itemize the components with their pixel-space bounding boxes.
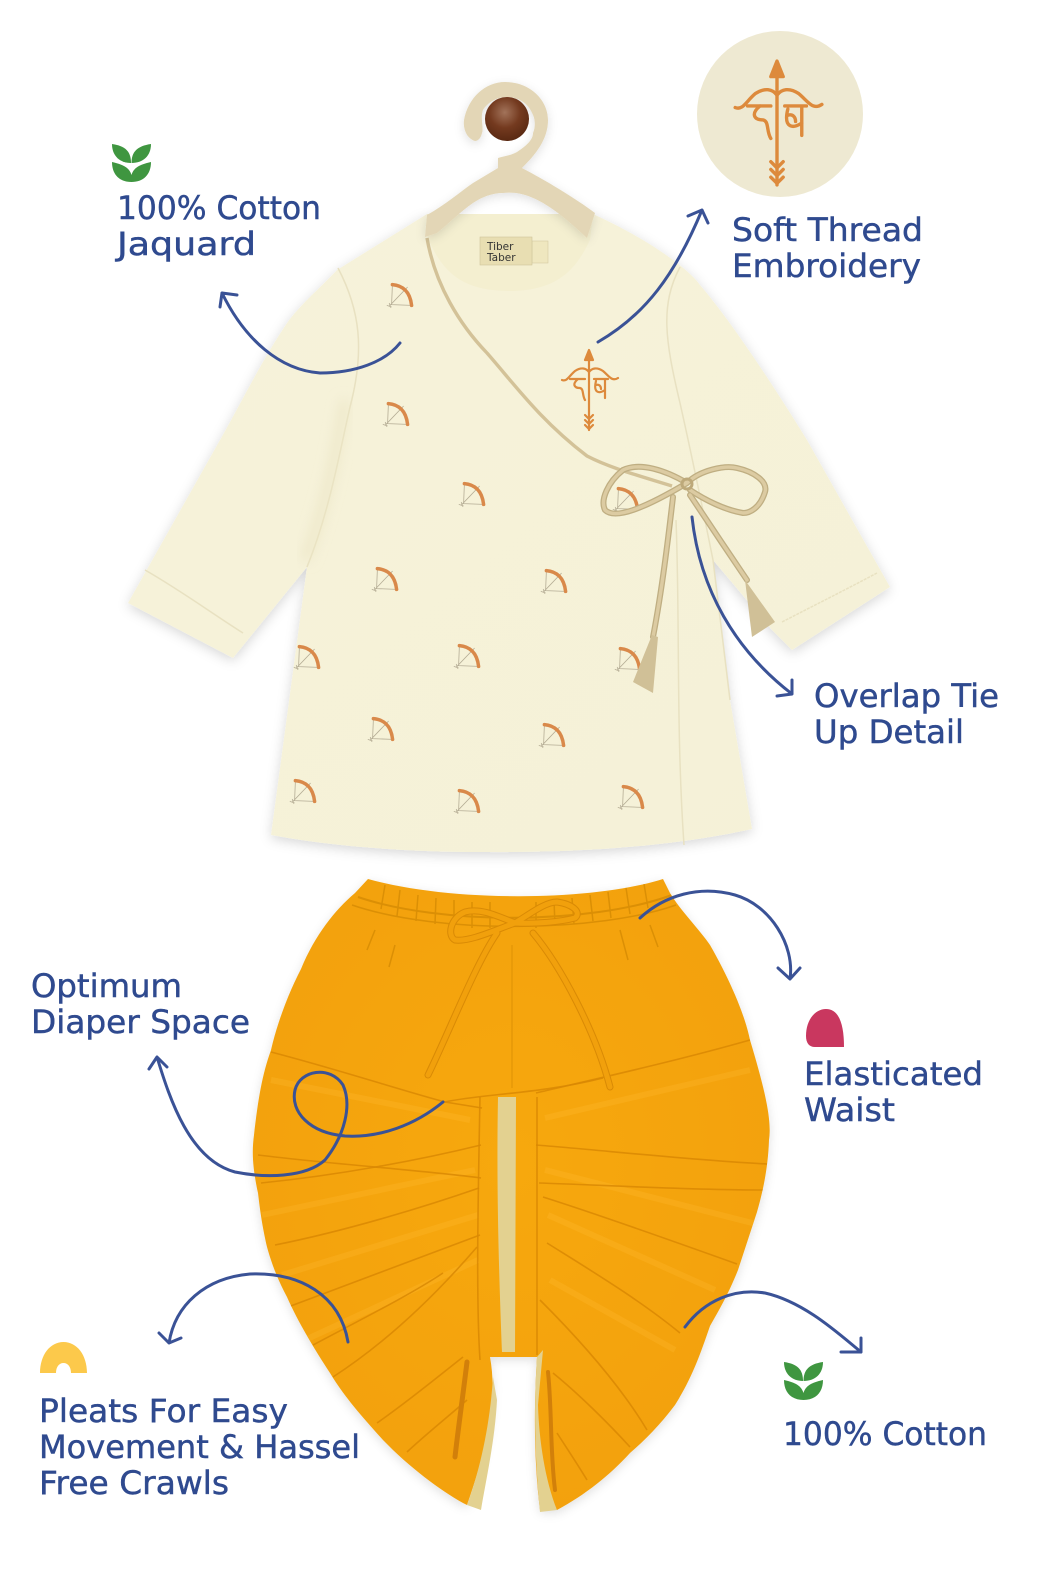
pleat highlights (262, 1070, 760, 1350)
drawstring (428, 902, 610, 1087)
neck label: Tiber (486, 241, 514, 253)
arrow: cotton jaquard (220, 293, 400, 373)
label: pleats: Movement & Hassel (39, 1428, 360, 1466)
label: 100% cotton jaquard (115, 189, 321, 263)
piping along overlap (427, 238, 672, 486)
icon: green leaves top (112, 144, 151, 182)
panel: kurta garment (128, 214, 890, 852)
kurta body and sleeves (128, 214, 890, 852)
label: overlap tie up detail: Overlap Tie (814, 677, 999, 715)
embroidered bow motifs (290, 285, 643, 814)
label: 100% cotton jaquard: 100% Cotton (117, 189, 321, 227)
label: elasticated waist (804, 1055, 983, 1129)
label: pleats (39, 1392, 360, 1502)
neck label (480, 237, 548, 265)
label: soft thread embroidery (732, 211, 923, 285)
label: elasticated waist: Waist (804, 1091, 895, 1129)
label: pleats: Free Crawls (39, 1464, 229, 1502)
gold border strips (467, 1097, 557, 1512)
arrow: elasticated waist (640, 891, 800, 979)
arrow: 100% cotton (685, 1292, 861, 1352)
pleat folds (258, 1040, 767, 1490)
hanger knob (485, 97, 529, 141)
tie up bow (604, 467, 775, 693)
arrow: overlap tie up (692, 517, 792, 696)
label: 100% cotton: 100% Cotton (783, 1415, 987, 1453)
label: overlap tie up detail (814, 677, 999, 751)
label: optimum diaper space (31, 967, 250, 1041)
label: soft thread embroidery: Soft Thread (732, 211, 923, 249)
label: overlap tie up detail: Up Detail (814, 713, 964, 751)
waistband gathers (352, 884, 676, 1088)
icon: pink drop (806, 1009, 844, 1047)
label: 100% cotton jaquard: Jaquard (115, 225, 256, 263)
arrow: pleats (159, 1274, 348, 1343)
neck label: Taber (486, 252, 516, 264)
icon: hanger (425, 82, 595, 238)
icon: green leaves bottom (784, 1362, 823, 1400)
icon: yellow arch (40, 1342, 87, 1373)
label: optimum diaper space: Optimum (31, 967, 182, 1005)
dhoti body (253, 879, 770, 1510)
label: optimum diaper space: Diaper Space (31, 1003, 250, 1041)
label: pleats: Pleats For Easy (39, 1392, 288, 1430)
neck opening (427, 214, 593, 291)
sleeve seams and folds (145, 267, 877, 845)
embroidered ram motif (562, 350, 618, 430)
label: soft thread embroidery: Embroidery (732, 247, 921, 285)
callout: soft thread embroidery zoom circle (697, 31, 863, 197)
label: elasticated waist: Elasticated (804, 1055, 983, 1093)
arrow: optimum diaper space (149, 1057, 443, 1176)
panel: dhoti garment (253, 879, 770, 1512)
arrow: soft thread embroidery (598, 210, 708, 342)
